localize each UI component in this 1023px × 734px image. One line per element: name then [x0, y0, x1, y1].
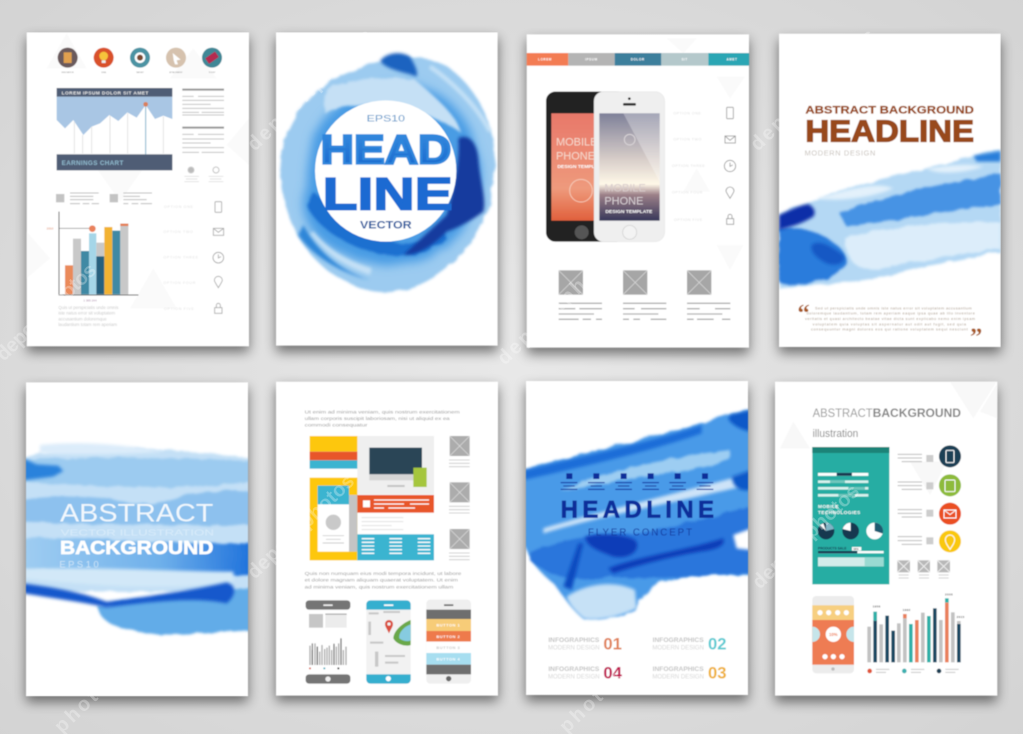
teal mobile screen: MOBILE	[818, 504, 839, 510]
numbered infographics: INFOGRAPHICS	[653, 637, 704, 644]
heading	[805, 104, 974, 158]
watermark: depositphotos	[493, 239, 627, 370]
teal mobile screen: 68%	[853, 547, 859, 551]
caption	[58, 305, 118, 327]
numbered infographics: 04	[603, 664, 623, 683]
heading: MODERN DESIGN	[805, 149, 875, 158]
intro text: Ut enim ad minima veniam, quis nostrum exercitationem	[305, 410, 460, 415]
heading: illustration	[813, 428, 858, 440]
multi bar chart: 1992	[903, 608, 911, 612]
numbered infographics	[548, 635, 727, 683]
map phone	[366, 600, 411, 684]
orange phone: 10%	[829, 632, 838, 637]
panel: mobile phone template	[527, 34, 749, 348]
headline text: BACKGROUND	[60, 537, 213, 558]
white phone	[594, 92, 665, 242]
numbered infographics: MODERN DESIGN	[548, 674, 600, 681]
panel: abstract background headline	[779, 34, 1001, 350]
area chart: earnings chart: EARNINGS CHART	[62, 160, 123, 167]
nav bar: AMET	[727, 57, 737, 61]
buttons phone: BUTTON 1	[436, 623, 461, 628]
second text: ad minima veniam, quis nostrum exercitationem ullam	[305, 585, 453, 590]
bar chart	[47, 212, 138, 302]
numbered infographics: MODERN DESIGN	[652, 674, 704, 681]
intro text	[305, 410, 460, 427]
option list with icons: OPTION FOUR	[672, 191, 703, 195]
numbered infographics: 03	[708, 664, 727, 683]
option list with icons	[163, 202, 224, 313]
black phone: MOBILE	[556, 137, 598, 149]
white phone: DESIGN TEMPLATE	[605, 209, 653, 215]
second text: Quis non numquam eius modi tempora incidunt, ut labore	[305, 571, 462, 576]
option list with icons: OPTION ONE	[164, 205, 194, 209]
numbered infographics: MODERN DESIGN	[548, 645, 600, 652]
orange phone	[812, 596, 854, 673]
heading: ABSTRACT BACKGROUND	[805, 104, 974, 116]
white phone: MOBILE	[604, 183, 646, 195]
headline text	[59, 500, 214, 570]
quote: Sed ut perspiciatis unde omnis iste natus error sit voluptatem accusantium	[815, 306, 972, 310]
icon row: IDEA	[101, 71, 107, 74]
numbered infographics: MODERN DESIGN	[652, 645, 704, 652]
option list with icons: OPTION TWO	[163, 230, 194, 234]
teal mobile screen	[812, 447, 889, 584]
option list with icons	[672, 107, 736, 224]
quote: veritatis et quasi architecto beatae vitae dicta sunt explicabo nemo enim ipsam	[805, 317, 975, 321]
quote: consequuntur magni dolores eos qui ratione voluptatem sequi nesciunt	[811, 328, 969, 332]
white phone: PHONE	[604, 195, 643, 207]
nav bar: LOREM	[538, 57, 552, 61]
white circle with headline: VECTOR	[360, 220, 412, 232]
numbered infographics: INFOGRAPHICS	[548, 637, 599, 644]
nav bar: DOLOR	[631, 57, 645, 61]
numbered infographics: INFOGRAPHICS	[653, 666, 704, 673]
second text: et dolore magnam aliquam quaerat voluptatem. Ut enim	[305, 578, 458, 583]
headline text: ABSTRACT	[60, 500, 213, 528]
black phone: DESIGN TEMPLATE	[557, 164, 605, 170]
caption: iste natus error sit voluptatem	[58, 311, 115, 316]
quote: ”	[970, 323, 982, 350]
icon row: ATTACHMENT	[169, 71, 183, 74]
bar chart: 2010	[47, 227, 54, 231]
flyer headline: HEADLINE	[561, 496, 714, 523]
quote: doloremque laudantium, totam rem aperiam eaque ipsa quae ab illo inventore	[806, 312, 975, 316]
intro text: ullam corporis suscipit laboriosam, nisi ut aliquid ex ea	[305, 416, 450, 421]
layout collage	[310, 436, 434, 560]
quote: “	[797, 300, 810, 327]
watercolor band	[23, 443, 251, 635]
multi bar chart	[867, 592, 965, 673]
nav bar: IPSUM	[585, 57, 598, 61]
area chart: earnings chart: LOREM IPSUM DOLOR SIT AMET	[62, 90, 148, 96]
numbered infographics: 01	[603, 635, 622, 654]
placeholder images	[449, 436, 470, 560]
buttons phone: BUTTON 4	[436, 656, 461, 661]
quote: voluptatem quia voluptas sit aspernatur aut odit aut fugit, sed quia	[813, 322, 967, 326]
area chart: earnings chart	[57, 88, 172, 170]
option list with icons: OPTION FIVE	[674, 218, 703, 222]
option list with icons: OPTION THREE	[672, 164, 705, 168]
heading	[813, 406, 961, 440]
watercolor ring	[280, 53, 495, 292]
heading: ABSTRACT	[813, 406, 873, 420]
watermark: depositphotos	[748, 481, 864, 594]
icon row: TICKET	[208, 72, 216, 74]
heading: BACKGROUND	[873, 406, 961, 420]
black phone	[546, 92, 626, 242]
multi bar chart: 1956	[873, 605, 881, 609]
white circle with headline	[315, 100, 456, 242]
nav bar	[527, 53, 749, 66]
intro text: commodi consequatur	[305, 422, 368, 427]
panel: earnings chart brochure	[27, 32, 249, 346]
panel: circular watercolor headline	[276, 32, 498, 346]
caption: laudantium totam rem aperiam	[58, 322, 117, 327]
option list with icons: OPTION TWO	[673, 137, 702, 141]
numbered infographics: 02	[708, 635, 727, 654]
black phone: PHONE	[556, 150, 595, 162]
option list with icons: OPTION FOUR	[163, 281, 196, 285]
caption: accusantium doloremque	[58, 316, 107, 321]
caption: Quis ut perspiciatis unde omnis	[58, 305, 118, 310]
heading: HEADLINE	[805, 115, 974, 149]
second text	[305, 571, 462, 590]
icon row: INNOVATION	[62, 71, 74, 74]
headline text: VECTOR ILLUSTRATION	[61, 527, 214, 537]
text blocks	[182, 90, 224, 182]
panel: mobile technologies	[775, 382, 997, 696]
panel: web wireframe layouts	[276, 382, 498, 696]
watercolor stroke	[523, 410, 751, 619]
flyer headline	[561, 473, 714, 539]
white circle with headline: EPS10	[367, 114, 405, 124]
icon row	[58, 48, 222, 74]
multi bar chart: 2015	[957, 615, 965, 619]
buttons phone	[426, 600, 471, 684]
watermark: depositphotos	[243, 25, 377, 156]
multi bar chart: 2006	[945, 592, 953, 596]
legend blocks	[56, 193, 152, 204]
panel: watercolor flyer concept	[523, 381, 751, 695]
teal mobile screen: PRODUCTS SALE	[818, 546, 847, 550]
watercolor stroke	[779, 150, 1001, 288]
flyer headline: FLYER CONCEPT	[588, 528, 692, 539]
buttons phone: BUTTON 3	[436, 645, 461, 650]
bar chart: 1 365 244	[83, 298, 97, 302]
placeholders	[897, 560, 950, 578]
placeholder images with text	[559, 270, 730, 319]
option list with icons: OPTION THREE	[163, 255, 199, 259]
watermark: depositphotos	[243, 471, 359, 584]
icon row: TARGET	[136, 71, 145, 74]
buttons phone: BUTTON 2	[436, 634, 461, 639]
panel: abstract vector illustration	[23, 382, 251, 696]
teal mobile screen: TECHNOLOGIES	[818, 510, 861, 516]
quote	[797, 300, 982, 350]
nav bar: SIT	[681, 57, 688, 61]
option list with icons: OPTION ONE	[673, 112, 701, 116]
headline text: EPS10	[59, 560, 99, 570]
numbered infographics: INFOGRAPHICS	[548, 666, 599, 673]
watermark: depositphotos	[746, 25, 880, 156]
white circle with headline: HEAD	[321, 126, 451, 172]
white circle with headline: LINE	[323, 168, 453, 219]
chart phone	[306, 600, 350, 684]
icon list	[898, 445, 961, 552]
option list with icons: OPTION FIVE	[164, 307, 194, 311]
